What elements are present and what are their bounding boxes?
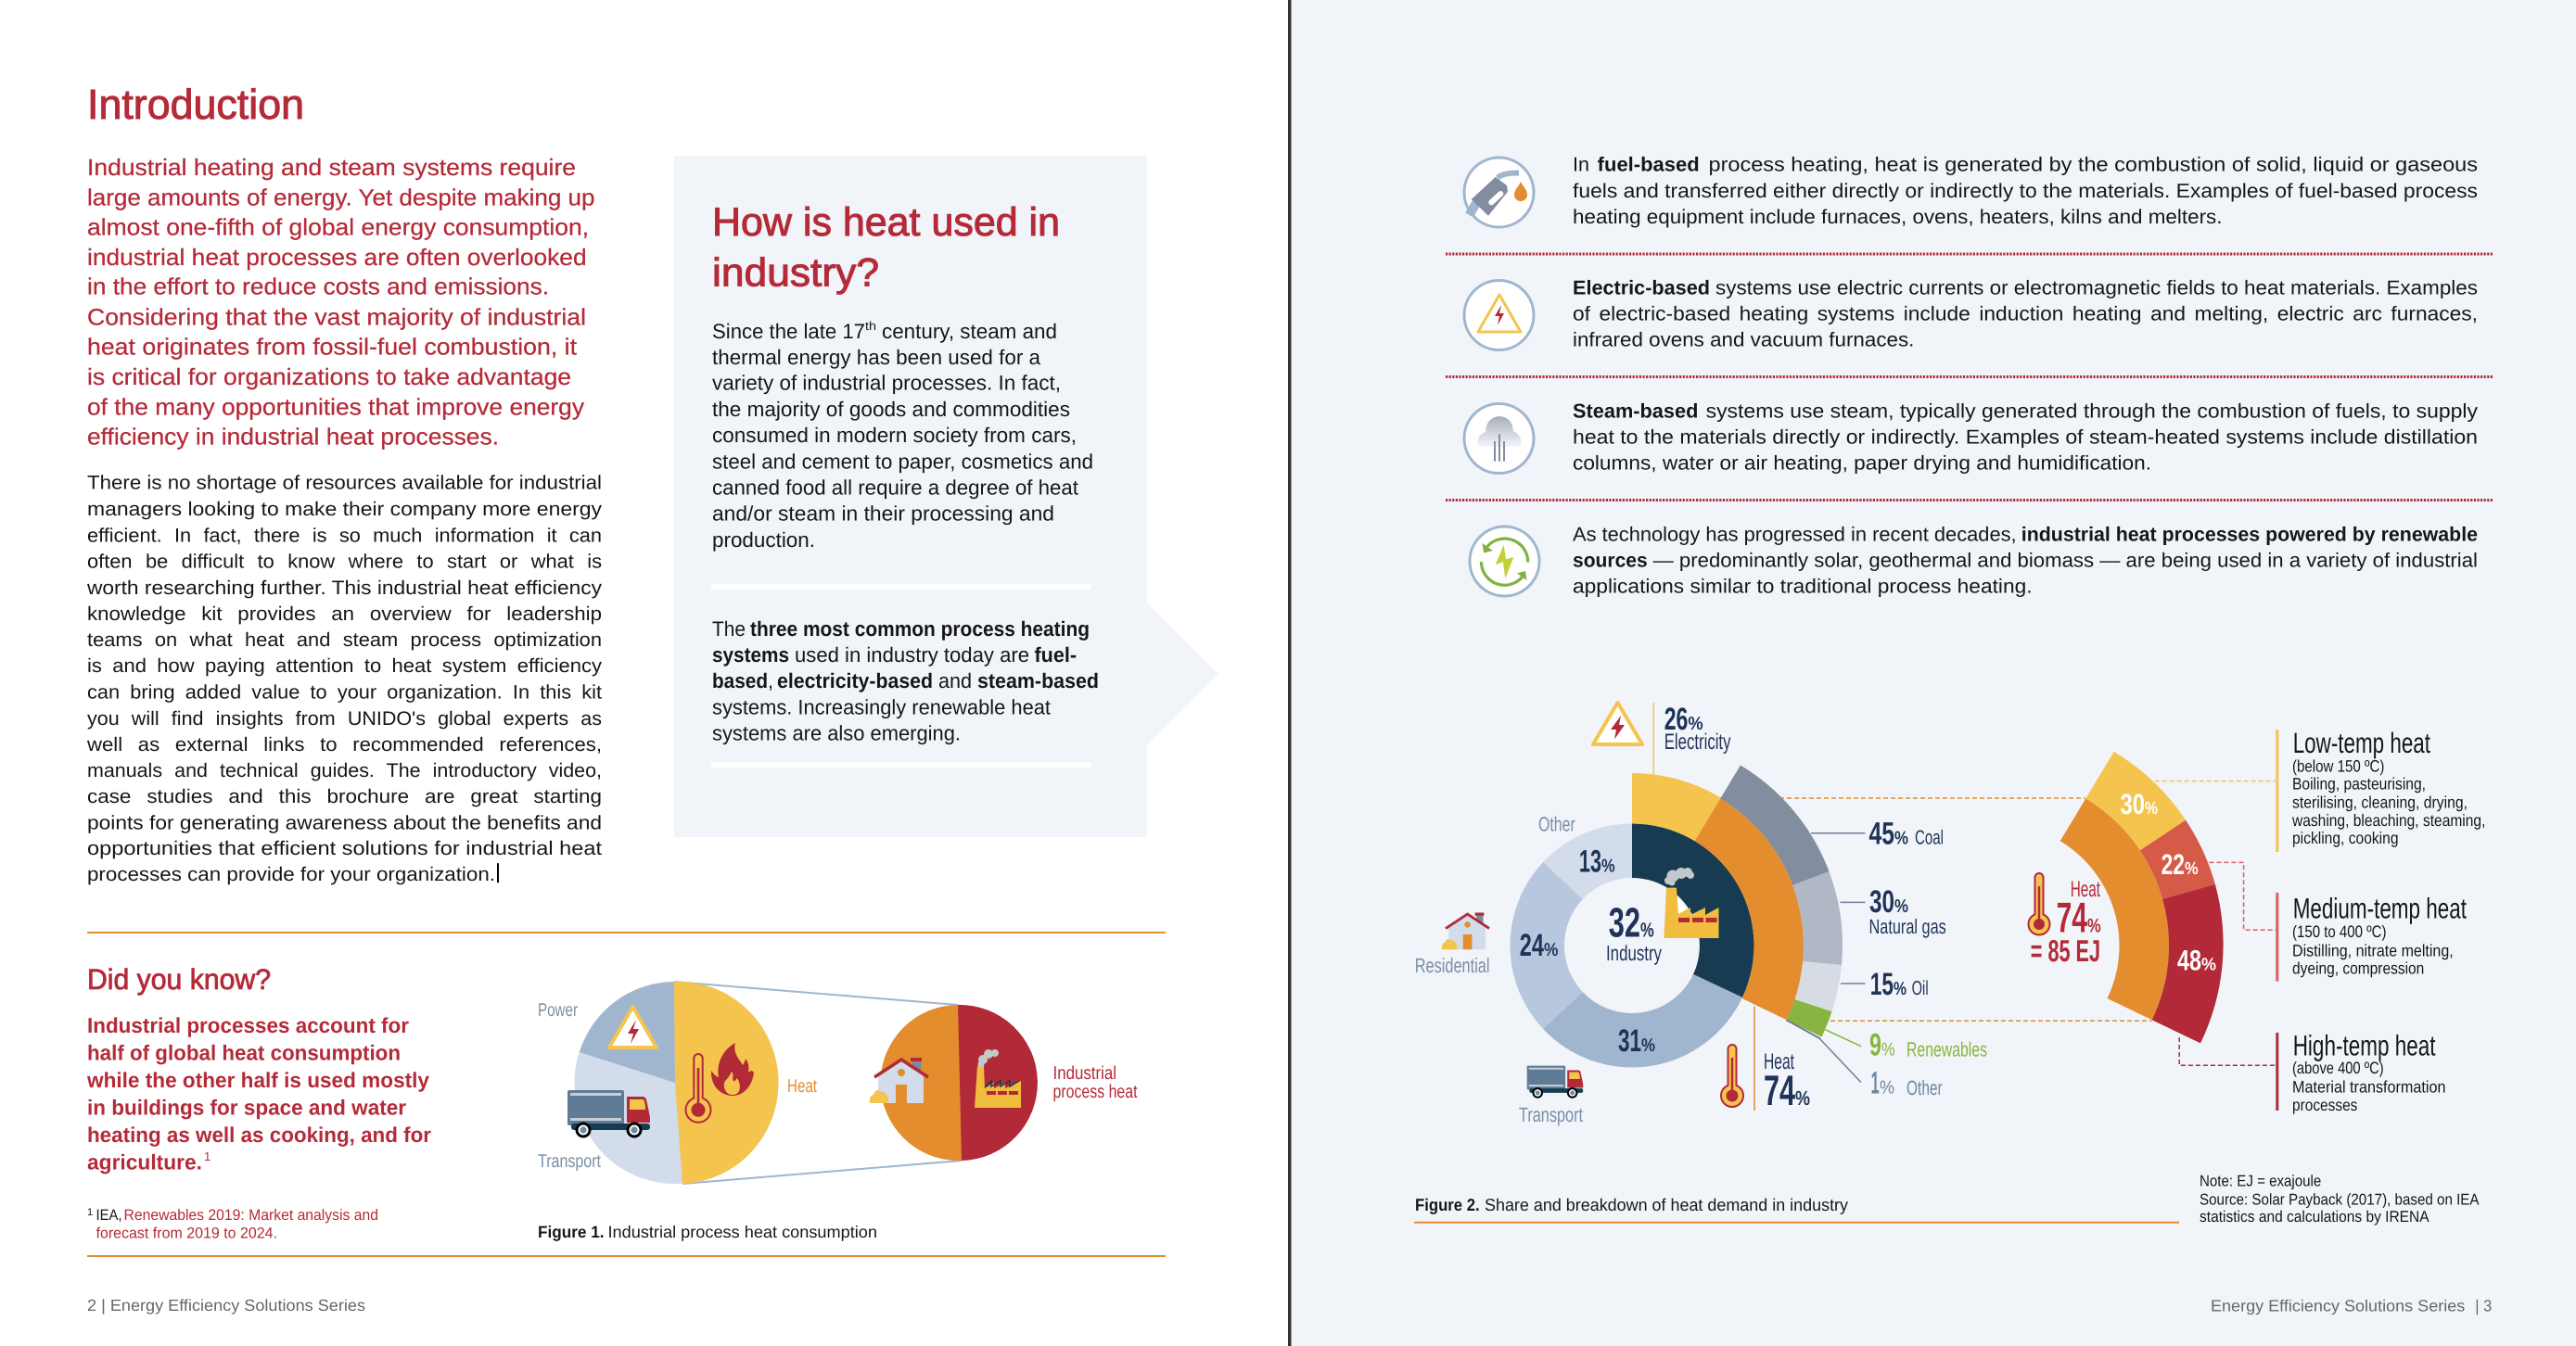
text: steam-based: columns, water or air heating, paper drying and humidification. [1573,451,2151,474]
text: fuel-based: heating equipment include furnaces, ovens, heaters, kilns and melters. [1573,206,2222,228]
icon: house [1442,912,1489,949]
panel text: history: variety of industrial processes. In fact, [712,372,1061,395]
legend: medium-temp heat [2276,892,2467,982]
text: fuel-based [1573,154,2478,228]
lead paragraph [87,155,595,451]
panel text: three systems: three most common process heating [750,617,1090,641]
legend: high-temp heat: Material transformation [2292,1078,2446,1097]
did you know text: agriculture. [87,1150,202,1175]
icon: flame [711,1043,754,1096]
footer right: | 3 [2475,1296,2492,1314]
lead paragraph: efficiency in industrial heat processes. [87,425,499,451]
panel text: history: steel and cement to paper, cosmetics and [712,450,1093,473]
heat total: = 85 EJ [2031,933,2100,968]
icon: thermometer [686,1054,710,1123]
panel text: history: Since the late 17 [712,320,865,343]
donut labels: % [1795,1086,1810,1110]
text: electric-based [1573,276,2478,351]
panel text: three systems: systems. Increasingly renewable heat [712,696,1052,719]
donut: final energy by sector [1511,823,1754,1068]
lead paragraph: Considering that the vast majority of industrial [87,305,586,331]
body paragraph: often be difficult to know where to start or what is [87,552,602,573]
heat total: 74 [2057,894,2087,942]
legend: medium-temp heat: Distilling, nitrate melting, [2292,941,2454,959]
did you know text: while the other half is used mostly [86,1068,429,1092]
legend: high-temp heat: High-temp heat [2293,1030,2436,1062]
text: steam-based: systems use steam, typically generated through the combustion of fuels, to supply [1706,400,2478,422]
lead paragraph: Industrial heating and steam systems require [87,155,576,181]
icon: thermometer [1721,1045,1743,1107]
did you know text: half of global heat consumption [87,1040,401,1064]
renewable and other labels: Other [1906,1076,1943,1099]
legend: high-temp heat [2276,1030,2446,1114]
panel text: history: century, steam and [882,320,1057,343]
panel text: history [712,319,1093,552]
heat total: % [2087,916,2101,937]
panel text: three systems [712,617,1099,745]
fuel labels: Oil [1912,977,1929,999]
icon: thermometer [2029,873,2049,934]
legend: medium-temp heat: (150 to 400 ºC) [2292,922,2387,941]
lead paragraph: almost one-fifth of global energy consumption, [87,215,589,241]
text: fuel-based: fuel-based [1598,154,1700,176]
fuel labels: Electricity [1664,730,1730,755]
right pie [881,1005,1038,1161]
heat total: Heat [2071,877,2100,902]
text: electric-based: Electric-based [1573,276,1710,298]
connector lines [674,982,962,1184]
renewable and other labels: 9 [1869,1027,1881,1062]
text: renewable: As technology has progressed in recent decades, [1573,523,2017,545]
icon: electric warning [1464,280,1534,350]
panel background with arrow [674,156,1218,837]
figure 2 note and source: Source: Solar Payback (2017), based on IEA [2200,1190,2480,1208]
icon: steam cloud [1464,404,1534,473]
arc percentages: 22 [2162,848,2185,881]
legend: high-temp heat: processes [2292,1096,2357,1114]
figure 1 labels: process heat [1053,1082,1138,1102]
renewable and other labels: % [1880,1078,1894,1098]
legend: low-temp heat: sterilising, cleaning, drying, [2292,793,2468,811]
donut labels: 13 [1579,844,1601,879]
heading: did you know: Did you know? [87,963,271,996]
text: renewable: industrial heat processes powered by renewable [2021,523,2478,545]
temperature connectors [2155,781,2276,1065]
arc percentages [2120,788,2216,976]
donut labels: % [1894,896,1908,917]
ring: heat fuel sources [1720,766,1843,1038]
arc percentages: % [2201,955,2216,974]
arc percentages: % [2185,859,2199,879]
body paragraph: well as external links to recommended references, [86,734,602,756]
text: renewable: — predominantly solar, geothermal and biomass — are being used in a variety of industrial [1653,550,2478,572]
legend: high-temp heat: (above 400 ºC) [2292,1059,2384,1077]
footer left: 2 | Energy Efficiency Solutions Series [87,1296,365,1314]
footnote: 1 [87,1207,93,1218]
icon: truck [1527,1066,1583,1098]
text: steam-based: heat to the materials directly or indirectly. Examples of steam-heated systems include distillation [1573,425,2478,448]
icon: factory [975,1049,1021,1108]
text: renewable [1573,523,2478,598]
figure 1 labels: Industrial [1053,1063,1116,1084]
panel text: three systems: systems [712,643,789,667]
body paragraph: can bring added value to your organization. In this kit [87,681,602,703]
legend: low-temp heat: (below 150 ºC) [2292,756,2384,775]
footnote: forecast from 2019 to 2024. [96,1225,277,1242]
figure 1 labels [538,1000,1138,1172]
left pie [575,982,779,1184]
icon: renewable cycle [1470,527,1539,596]
lead paragraph: of the many opportunities that improve energy [87,394,585,420]
icon: factory [1664,868,1719,938]
text: fuel-based: fuels and transferred either directly or indirectly to the materials. Examples of fuel-based process [1573,180,2478,202]
sector labels: Residential [1415,954,1489,977]
figure 1 caption: Figure 1. [538,1223,605,1241]
panel text: three systems: The [712,617,746,641]
text: renewable: sources [1573,550,1648,572]
fuel labels [1606,730,1946,1074]
renewable and other labels: Renewables [1906,1038,1987,1060]
icon: warning triangle [609,1007,657,1048]
donut labels: % [1641,1035,1655,1056]
panel text: history: consumed in modern society from cars, [712,424,1077,447]
panel text: history: canned food all require a degree of heat [712,476,1079,500]
text: electric-based: systems use electric currents or electromagnetic fields to heat materials. Examples [1715,276,2478,298]
renewable and other labels: 1 [1871,1066,1880,1101]
donut labels: % [1894,828,1908,848]
lead paragraph: in the effort to reduce costs and emissions. [87,274,549,300]
row: electric-based [1464,276,2478,351]
panel text: three systems: steam-based [977,669,1099,692]
renewable and other labels: % [1881,1039,1895,1060]
text: fuel-based: In [1573,154,1589,176]
lead paragraph: heat originates from fossil-fuel combustion, it [87,335,577,361]
legend: low-temp heat [2276,727,2485,852]
legend: low-temp heat: Low-temp heat [2293,727,2430,759]
heat total [2031,877,2101,968]
figure 2 caption: Figure 2. [1415,1195,1480,1214]
did you know text [86,1013,431,1175]
sector labels: Other [1538,813,1575,836]
figure 2 caption: Share and breakdown of heat demand in industry [1485,1195,1849,1214]
panel text: history: thermal energy has been used for a [712,346,1040,369]
panel text: three systems: and [938,669,972,692]
text: renewable: applications similar to traditional process heating. [1573,576,2033,598]
donut labels: 15 [1870,967,1894,1002]
legend: low-temp heat: washing, bleaching, steaming, [2291,811,2485,830]
did you know text: heating as well as cooking, and for [87,1123,431,1147]
text: fuel-based: process heating, heat is generated by the combustion of solid, liquid or gaseous [1708,154,2478,176]
text: steam-based: Steam-based [1573,400,1698,422]
panel text: history: th [865,319,876,333]
donut labels: % [1601,856,1615,876]
arc: heat by temperature [2060,752,2224,1043]
legend: medium-temp heat: Medium-temp heat [2293,892,2467,924]
text: steam-based [1573,400,2478,474]
body paragraph: knowledge kit provides an overview for leadership [87,603,602,625]
figure 1 labels: Transport [538,1151,601,1172]
donut labels: 26 [1664,702,1688,737]
legend: low-temp heat: Boiling, pasteurising, [2292,774,2426,793]
arc percentages: 30 [2120,788,2145,820]
figure 1 labels: Heat [787,1076,817,1097]
figure 1 labels: Power [538,1000,578,1021]
panel: how is heat used in industry [674,156,1218,837]
figure 1: industrial process heat consumption [538,982,1138,1241]
title: Introduction: Introduction [87,81,304,128]
donut labels: % [1544,940,1559,960]
icon: house [870,1058,928,1103]
donut labels: 30 [1869,884,1894,920]
body paragraph: There is no shortage of resources available for industrial [87,472,602,493]
text: electric-based: of electric-based heating systems include induction heating and melting, electric arc furnaces, [1573,303,2478,325]
row: renewable [1470,523,2478,598]
figure 1 caption: Industrial process heat consumption [608,1223,877,1241]
panel text: three systems: , [768,669,773,692]
body paragraph: processes can provide for your organization. [87,864,495,885]
text: electric-based: infrared ovens and vacuum furnaces. [1573,329,1914,351]
lead paragraph: is critical for organizations to take advantage [87,364,571,390]
panel heading [712,200,1060,295]
fuel labels: Coal [1915,826,1944,848]
dashed connectors between rings [1720,798,2151,1021]
body paragraph: points for generating awareness about the benefits and [87,812,602,833]
body paragraph: opportunities that efficient solutions for industrial heat [87,838,602,859]
footnote: Renewables 2019: Market analysis and [124,1207,378,1224]
footnote: IEA, [96,1207,122,1224]
row: steam-based [1464,400,2478,474]
body paragraph: managers looking to make their company more energy [87,499,603,520]
body paragraph: teams on what heat and steam process optimization [87,629,602,651]
renewable and other labels [1869,1027,1987,1101]
panel text: three systems: fuel- [1035,643,1077,667]
panel text: three systems: used in industry today are [795,643,1029,667]
body paragraph: efficient. In fact, there is so much information it can [87,525,602,546]
lead paragraph: large amounts of energy. Yet despite making up [87,184,595,210]
panel heading: industry? [712,250,879,295]
panel text: history: the majority of goods and commodities [712,398,1070,421]
arc percentages: 48 [2177,944,2201,976]
figure 2 note and source: Note: EJ = exajoule [2200,1173,2321,1190]
body paragraph: case studies and this brochure are great starting [87,786,602,807]
did you know text: Industrial processes account for [87,1013,409,1037]
body paragraph: is and how paying attention to heat system efficiency [87,655,603,677]
icon: fuel nozzle [1464,158,1534,227]
panel heading: How is heat used in [712,200,1060,245]
fuel labels: Natural gas [1869,915,1946,938]
figure 2 note and source: statistics and calculations by IRENA [2200,1208,2429,1225]
donut labels: % [1894,979,1906,999]
lead paragraph: industrial heat processes are often overlooked [87,245,587,271]
body paragraph: manuals and technical guides. The introductory video, [87,760,602,781]
donut labels: 45 [1869,816,1894,851]
figure 2 note and source [2200,1173,2480,1225]
legend: medium-temp heat: dyeing, compression [2292,959,2424,977]
donut labels: 31 [1618,1023,1641,1059]
donut labels: 24 [1520,928,1544,963]
panel text: three systems: systems are also emerging. [712,722,961,745]
arc percentages: % [2145,799,2158,819]
icon: truck [567,1090,650,1138]
sector labels: Transport [1519,1103,1583,1126]
did you know text: 1 [204,1149,210,1163]
panel text: three systems: electricity-based [777,669,933,692]
panel text: history: and/or steam in their processing and [712,502,1054,526]
footer right: Energy Efficiency Solutions Series [2211,1296,2466,1314]
legend: low-temp heat: pickling, cooking [2292,829,2398,847]
body paragraph: you will find insights from UNIDO's global experts as [87,708,602,730]
donut labels [1520,702,1908,1114]
panel text: history: production. [712,528,815,552]
row: fuel-based [1464,154,2478,228]
body paragraph [86,473,603,885]
footnote [87,1207,378,1242]
donut labels: 32 [1609,898,1640,946]
fuel labels: Heat [1764,1049,1794,1074]
did you know text: in buildings for space and water [87,1096,406,1120]
figure 2: share and breakdown of heat demand [1414,702,2485,1225]
leader lines [1653,703,1865,1111]
icon: electricity warning [1593,703,1642,744]
sector labels [1415,813,1583,1126]
donut labels: % [1640,918,1654,941]
panel text: three systems: based [712,669,768,692]
body paragraph: worth researching further. This industrial heat efficiency [86,578,603,599]
ring: electricity and heat [1632,773,1804,1020]
fuel labels: Industry [1606,941,1662,965]
donut labels: 74 [1764,1066,1795,1114]
donut labels: % [1688,714,1703,734]
